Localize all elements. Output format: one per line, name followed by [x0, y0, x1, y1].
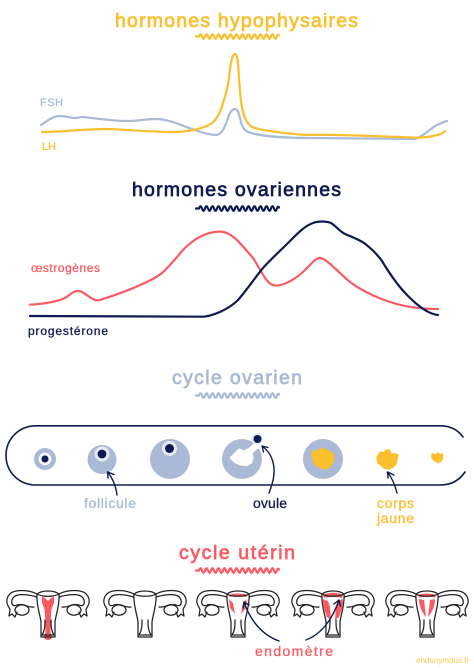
- curve: oestrogens: [30, 232, 438, 309]
- uterus 5: late endometrium: [386, 591, 468, 637]
- squiggle underline: cycle utérin: [196, 568, 279, 573]
- corpus luteum: [377, 450, 398, 469]
- uterus 3: thin endometrium: [197, 591, 279, 637]
- chart: ovarian hormones: [28, 222, 438, 338]
- uterus 4: thick endometrium: [292, 591, 374, 637]
- label: endomètre: endomètre: [255, 643, 333, 659]
- arrow to ovum: [262, 446, 274, 493]
- curve: LH: [42, 54, 445, 138]
- label: oestrogens: œstrogènes: [31, 261, 100, 275]
- arrow to corpus luteum: [388, 472, 397, 493]
- arrow to endometrium left: [243, 602, 279, 641]
- corpus luteum forming: [303, 439, 343, 479]
- follicle 2: [88, 445, 116, 474]
- corpus albicans: [432, 453, 442, 462]
- label: endomètre: [243, 600, 340, 659]
- title: hormones hypophysaires: hormones hypophysaires: [115, 10, 358, 32]
- squiggle underline: cycle ovarien: [196, 393, 279, 398]
- arrow to endometrium right: [306, 600, 340, 640]
- curve: FSH: [41, 109, 447, 139]
- label: LH: LH: [42, 141, 56, 153]
- label: follicule: follicule: [84, 495, 136, 511]
- title: cycle ovarien: cycle ovarien: [172, 367, 302, 389]
- label: ovule: ovule: [253, 495, 287, 511]
- title: hormones ovariennes: hormones ovariennes: [132, 179, 341, 201]
- ruptured follicle and ovum: [222, 433, 266, 479]
- curve: progesterone: [30, 222, 438, 317]
- chart: pituitary hormones: [40, 54, 447, 153]
- label: FSH: FSH: [40, 97, 63, 109]
- squiggle underline: hormones hypophysaires: [196, 34, 279, 39]
- uterus 2: after menstruation: [104, 591, 186, 637]
- title: cycle utérin: cycle utérin: [179, 542, 295, 564]
- uterus 1: menstruation: [7, 591, 89, 640]
- squiggle underline: hormones ovariennes: [196, 206, 279, 211]
- panel: ovarian cycle capsule: [6, 426, 465, 485]
- label: progesterone: progestérone: [28, 324, 108, 338]
- label: corps jaune: [376, 472, 414, 526]
- label: corps jaune: corps: [377, 495, 414, 511]
- label: follicule: [84, 472, 136, 511]
- follicle 3: [150, 439, 190, 479]
- label: corps jaune: jaune: [376, 510, 414, 526]
- capsule outline: [6, 426, 465, 485]
- arrow to follicle: [108, 472, 117, 495]
- credit: endonymous.fr: [416, 656, 469, 665]
- label: ovule: [253, 446, 287, 511]
- follicle 1: [34, 448, 56, 470]
